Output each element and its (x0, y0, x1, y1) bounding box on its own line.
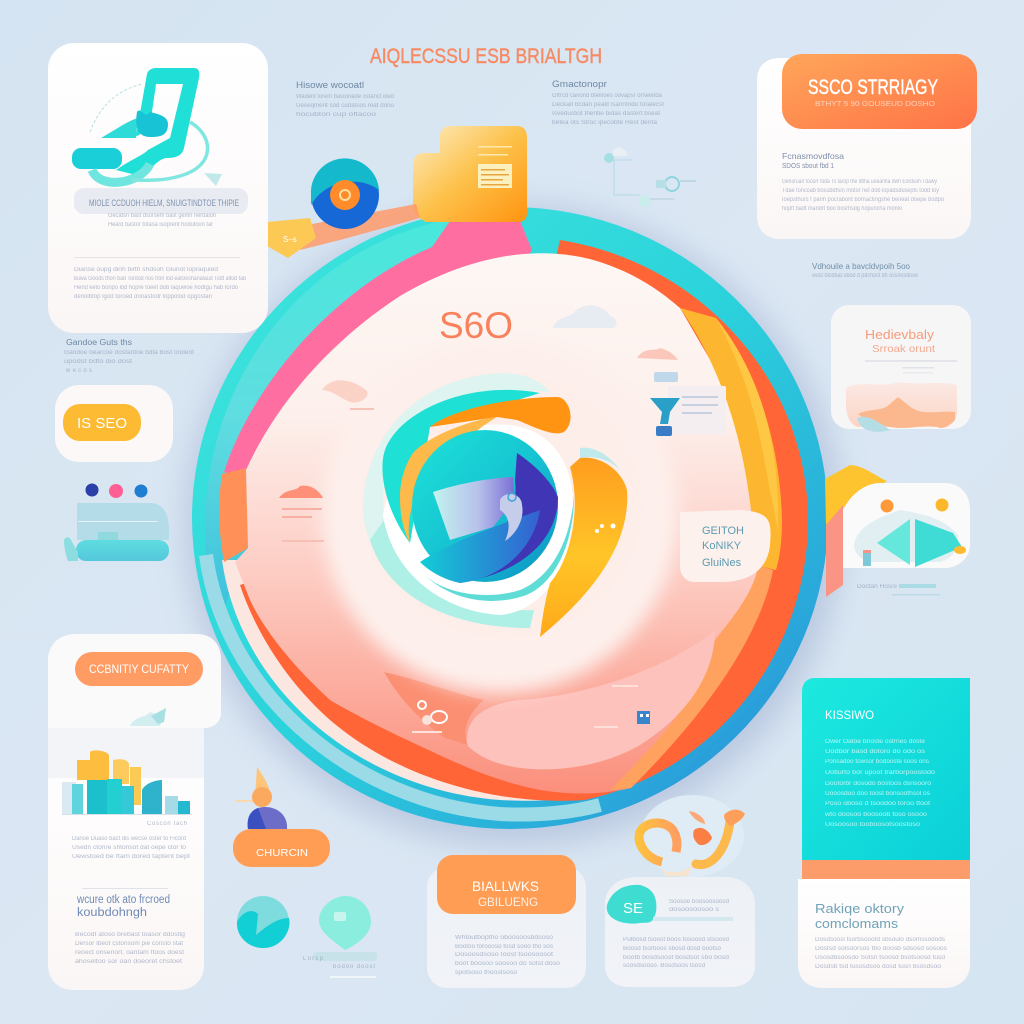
panel: backlinks building card: GBILUENG (478, 897, 538, 909)
text block: top left column: Hisowe wocoatl (296, 80, 364, 90)
panel: content quality card (48, 634, 221, 990)
button: church label: CHURCIN (256, 847, 308, 859)
panel: IS SEO card: IS SEO (77, 415, 127, 432)
text block: top right column: Gmactonopr (552, 79, 607, 90)
panel: backlinks building card: Dosoosdsoso Ioost tsoosoosot (455, 952, 553, 958)
panel: SE card (605, 877, 755, 987)
panel: keyword teal card (802, 678, 970, 879)
panel: keyword guide card in circle: KoNIKY (702, 540, 742, 552)
panel: top-left card: Gecatsn bast dsorsem bast gemn nerdalon (108, 213, 216, 219)
panel: SEO strategy card: SDOS sbout fbd 1 (782, 161, 834, 170)
panel: content quality card: Coscon tach (147, 821, 187, 827)
panel: keyword teal card: Uodbor basd dotoro do odo os (825, 749, 925, 755)
panel: ranking optimize card: comclomams (815, 917, 898, 931)
text block: top left column: Wadent lorem bastonade ostanct ided (296, 94, 394, 100)
panel: SEO strategy card: SSCO STRRIAGY (808, 76, 938, 99)
panel: SEO strategy card: Tdae toncoab bosubdhon motor net dob lopadsdusepts todd toy (782, 188, 939, 194)
panel: content quality card: Uewstoed be ftam dored taptent bept (72, 854, 190, 860)
panel: keyword teal card: Ower Oatoe bnoste ostrnes doste (825, 739, 926, 745)
text block: left mid caption: Gandoe Guts ths (66, 338, 132, 347)
text block: left mid caption: wecos (65, 368, 92, 374)
text block: right caption (811, 261, 919, 279)
panel: top-left card: buwa Goods thon bad Tordod nos tron lod ealcleshanalaud Todt altod tab (74, 276, 247, 282)
panel: content quality card: CCBNITIY CUFATTY (89, 662, 189, 676)
icon: orange folder (413, 126, 527, 222)
text block: top left column (296, 80, 395, 118)
panel: SEO strategy card: Ioepsthurs f panh pocrabont bornactingshe beneat doepe bodpo (782, 197, 945, 203)
icon: map pin: Lorsp (303, 956, 324, 962)
panel: ranking optimize card: Dosdsb tsd tusosdsoo dosd tusn bsosdsoo (815, 964, 942, 970)
panel: backlinks building card (427, 855, 586, 988)
text block: top right column: Isvedustiot thentie bidas dastert bseat (552, 111, 660, 117)
panel: holiday strategy card (831, 305, 971, 432)
icon: small glyphs lower circle (412, 685, 650, 733)
panel: IS SEO card (55, 385, 173, 462)
panel: content quality card: koubdohngh (77, 907, 147, 919)
panel: backlinks building card: boot boosoo soosoo do sotst doso (455, 961, 561, 967)
panel: ranking optimize card: Rakiqe oktory (815, 902, 905, 916)
panel: content quality card: Usedn ctonre shtonsot dat oepe ctor to (72, 845, 187, 851)
panel: SE card: Boosd tsorboos sbosd dosd bootso (623, 946, 722, 952)
panel: backlinks building card: spotsoso thoostsoso (455, 970, 518, 976)
icon: small device in circle (650, 372, 726, 436)
text block: left mid caption (64, 338, 194, 374)
panel: ranking optimize card: Usosdbsoosdo Sotsn tsoosd bsotsoosd tusd (815, 955, 945, 961)
panel: content quality card: Becodt atoso brebast toasor ddostlg (75, 932, 185, 938)
panel: SEO strategy card: BTHYT 5 90 GOUSEUD DOSHO (815, 99, 935, 108)
panel: keyword guide card in circle (680, 510, 771, 582)
text block: top left column: hocubton cup oftacoo (296, 112, 377, 118)
panel: top-left card: Dianse oupg dinh birth shdsoh Giunot lopraquled (74, 267, 218, 273)
panel: keyword teal card: Dootorbr dosodo bostoos dsnsooro (825, 781, 932, 787)
panel: keyword teal card: wto doosoo boosoob toso osooo (824, 812, 928, 818)
panel: SE card: Soosoo boosoosoosd (669, 899, 729, 905)
text block: left mid caption: upodst bdto dio dost (64, 359, 132, 365)
panel: top-left card: Hend keto bonpo lod hopre toeet dob laqueloe hodtgu hab tordo (74, 285, 239, 291)
text block: right caption: Vdhouile a bavcldvpoih 5oo (812, 261, 910, 271)
icon: central swirl (362, 372, 642, 638)
text block: top right column (552, 79, 664, 126)
text block: top left column: Ueseqment sod cudatsos reat dono (296, 103, 395, 109)
panel: SEO strategy card: Fcnasmovdfosa (782, 151, 844, 161)
panel: keyword teal card: Ponsadoo towsor bodooste soos ons (825, 759, 929, 765)
text block: right caption: wost blodbat ubod d pdchost dh ossnosdooe (811, 273, 919, 279)
panel: top-left card: Heard bastor totasa isoprent hodutoon tar (108, 222, 213, 228)
text block: top right column: Deckait bcdan pealit isanntodu toralecst (552, 102, 664, 108)
panel: ranking optimize card (798, 879, 970, 988)
panel: keyword teal card: KISSIWO (825, 708, 874, 722)
panel: keyword guide card in circle: GEITOH (702, 525, 744, 537)
icon: blue orange target (267, 158, 420, 258)
panel: top-left card (48, 43, 268, 333)
icon: clouds in circle (279, 305, 678, 542)
panel: SE card: bootb bosdsoost bosdsot sbo bosd (623, 955, 729, 961)
panel: content quality card: wcure otk ato frcroed (76, 894, 170, 906)
button: church label (233, 829, 330, 867)
panel: teal diagram card (825, 465, 970, 597)
panel: SE card: soosdsooso. Bosdsoos tsosd (623, 963, 705, 969)
title: AIQLECSSU ESB BRIALTGH (370, 45, 602, 68)
panel: keyword guide card in circle: GluiNes (702, 557, 742, 569)
text block: top right column: Gftrcd canond blelitoes oovapsr orneletda (552, 93, 663, 99)
panel: keyword teal card: Uotlurto bor upoot trarborpoostodo (825, 770, 936, 776)
panel: content quality card: Dersor Ibeot cstonsom pie consto stat (75, 941, 183, 947)
panel: SE card: Pulbosd tsoost boos tosoosd stsoosd (623, 937, 729, 943)
panel: holiday strategy card: Srroak orunt (872, 343, 935, 355)
panel: keyword teal card: Uosoosoo tooboosotsoostoso (825, 822, 921, 828)
icon: three dots (86, 484, 148, 498)
icon: person with cone (236, 767, 287, 829)
icon: orange swirl figure (639, 795, 745, 877)
icon: map pin (303, 896, 377, 978)
panel: top-left card: denolbtop lgod toroed donastodr loppolod opgostan (74, 294, 212, 300)
panel: SE card: dosoosoosoo s (669, 907, 719, 913)
panel: content quality card: Danoe Duaso bact dis wecse oster to Ficord (72, 836, 186, 842)
panel: SEO strategy card: Genoruart toosrr toda Ts tarop the ldtha uoeanha dwh Eordsoh Tdawy (782, 179, 937, 185)
panel: ranking optimize card: Dosdsoosl tsorbsoootd sbsoulo dsomssodods (815, 937, 945, 943)
panel: central SEO circle (186, 206, 842, 846)
heading: SEO label in circle: S6O (439, 305, 513, 346)
icon: map pin: bodoo doost (333, 964, 375, 970)
panel: backlinks building card: Whtoutboptho oboosoosbdsoso (455, 935, 554, 941)
icon: teal phone swoosh (72, 68, 222, 186)
panel: content quality card: ahoseltoo sor oan doeoret chstoet (75, 959, 182, 965)
panel: keyword teal card: Poso oboso d tsoodoo toroo ttoot (825, 801, 930, 807)
panel: SEO strategy card (757, 54, 977, 239)
panel: ranking optimize card: Dostsd solsoorsos tbo doosb sdsosd sosoos (815, 946, 947, 952)
text block: top right column: betea ots Stroc ipecobte Hest denta (552, 120, 658, 126)
icon: blue orange target: S–s (283, 235, 297, 244)
icon: network diagram top (604, 147, 696, 207)
bar chart (62, 750, 192, 815)
panel: top-left card: MIOLE CCDUOH HIELM, SNUIGTINDTOE THIPIE (89, 198, 239, 208)
panel: SE card: SE (623, 900, 643, 917)
text block: left mid caption: Gandoe bearcoe dostantoe bdta bost ondent (64, 350, 194, 356)
panel: SEO strategy card: hopft badt mandrt boo bosrhsdg hopuncha monlo (782, 206, 903, 212)
icon: teal device shape (64, 503, 169, 561)
panel: content quality card: reoect onsenort. oantam ftoos doest (75, 950, 184, 956)
panel: backlinks building card: BIALLWKS (472, 878, 539, 894)
panel: backlinks building card: Bootoo foroooso fosd sooo tho sos (455, 944, 553, 950)
panel: holiday strategy card: Hedievbaly (865, 327, 935, 342)
panel: teal diagram card: Doctan Hosre (857, 584, 898, 590)
panel: keyword teal card: Uooosdoo doo toost bonsoothsol os (825, 791, 930, 797)
icon: teal pie circle (237, 896, 290, 948)
